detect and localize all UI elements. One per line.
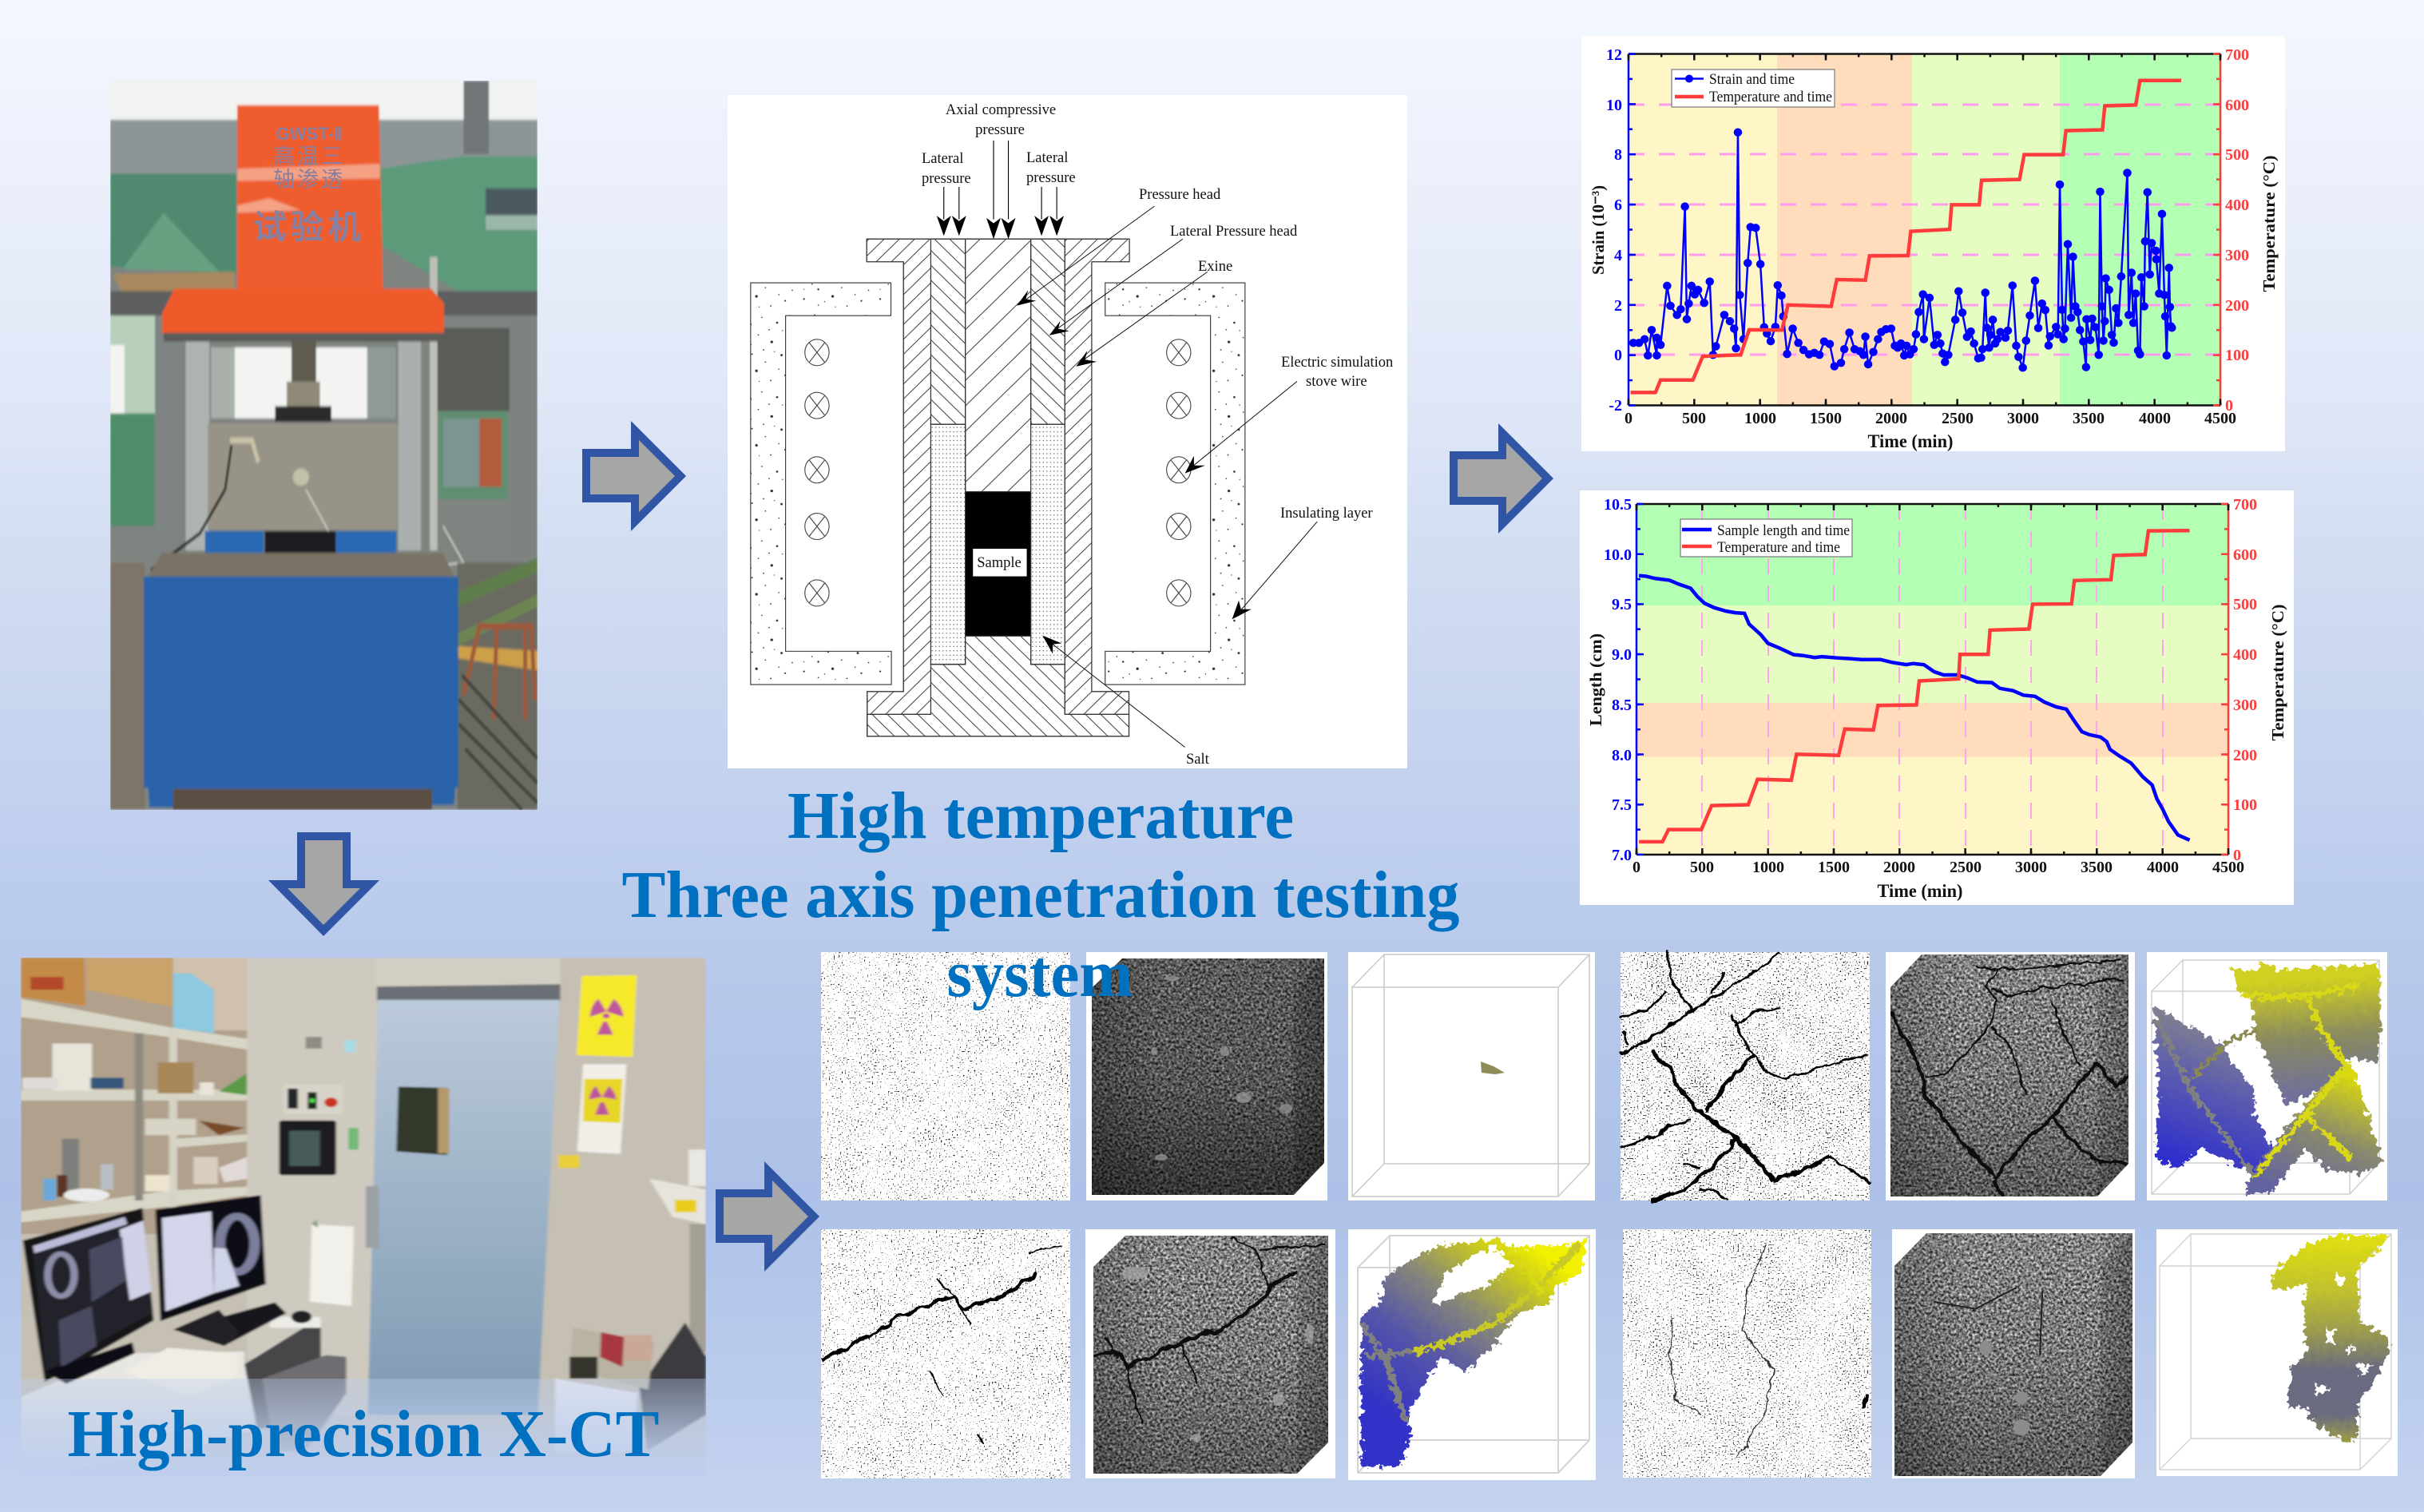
series: sample length <box>1639 576 2190 840</box>
x tick labels: 500 <box>1690 859 1714 876</box>
title: high temperature system <box>621 779 1460 1011</box>
left tick labels: 9.0 <box>1612 646 1632 664</box>
x tick labels <box>1633 859 2244 876</box>
x tick labels: 1000 <box>1752 859 1784 876</box>
x tick labels: 3500 <box>2073 410 2105 427</box>
axis titles: Strain (10⁻³) <box>1589 185 1608 275</box>
chart background <box>1581 36 2285 451</box>
schematic background <box>728 95 1407 768</box>
chart: strain and temperature vs time <box>1581 36 2285 451</box>
sign text: 高温三 <box>273 145 345 169</box>
right tick labels <box>2225 46 2249 415</box>
left tick labels: 7.5 <box>1612 796 1632 814</box>
3D fracture network D <box>2156 1229 2398 1476</box>
axis titles: Length (cm) <box>1586 633 1605 726</box>
title: high temperature system: High temperature <box>788 779 1294 853</box>
left tick labels: -2 <box>1609 397 1622 415</box>
schematic labels: Exine <box>1198 259 1232 275</box>
left tick labels: 2 <box>1614 297 1622 315</box>
left tick labels: 10.5 <box>1604 496 1632 514</box>
right tick labels: 0 <box>2233 847 2241 864</box>
arrow: machine to schematic <box>582 421 686 531</box>
title: high-precision X-CT: High-precision X-CT <box>67 1397 660 1471</box>
left tick labels: 9.5 <box>1612 596 1632 613</box>
schematic drawing <box>751 141 1317 747</box>
CT cube D <box>1892 1229 2135 1478</box>
x tick labels: 2500 <box>1942 410 1974 427</box>
axis titles: Time (min) <box>1877 881 1963 901</box>
chart: sample length and temperature vs time <box>1580 490 2294 905</box>
left tick labels: 12 <box>1606 46 1622 64</box>
reference dashes <box>1702 504 2163 855</box>
CT cube B <box>1886 952 2135 1200</box>
schematic labels: pressure <box>975 122 1025 138</box>
right tick labels: 400 <box>2225 196 2249 214</box>
x tick labels: 3000 <box>2015 859 2047 876</box>
schematic labels: pressure <box>922 171 971 187</box>
axes and ticks <box>1628 53 2222 407</box>
left tick labels: 4 <box>1614 247 1622 264</box>
axis titles <box>1589 155 2279 451</box>
schematic labels: Electric simulation <box>1281 355 1393 371</box>
x tick labels: 2500 <box>1950 859 1982 876</box>
right tick labels: 500 <box>2233 596 2257 613</box>
right tick labels: 0 <box>2225 397 2233 415</box>
x tick labels: 3000 <box>2007 410 2039 427</box>
x tick labels: 4000 <box>2139 410 2171 427</box>
series: strain <box>1633 133 2172 367</box>
axis titles: Temperature (°C) <box>2268 604 2287 741</box>
legend: Temperature and time <box>1709 89 1832 105</box>
left tick labels: 6 <box>1614 196 1622 214</box>
schematic labels: Salt <box>1186 752 1210 768</box>
3D fracture network A <box>1348 952 1595 1200</box>
x tick labels: 1500 <box>1818 859 1850 876</box>
arrow: X-CT to CT images <box>716 1161 819 1272</box>
title: high temperature system: Three axis penetration testing <box>621 858 1460 932</box>
sign text: 轴渗透 <box>273 168 345 192</box>
x tick labels: 1000 <box>1744 410 1776 427</box>
right tick labels: 400 <box>2233 646 2257 664</box>
left tick labels: 8.5 <box>1612 696 1632 714</box>
schematic labels <box>922 102 1393 768</box>
x tick labels: 4000 <box>2147 859 2179 876</box>
x tick labels: 0 <box>1633 859 1640 876</box>
x tick labels: 4500 <box>2204 410 2236 427</box>
legend <box>1680 519 1852 557</box>
schematic labels: Sample <box>977 555 1022 571</box>
sign text <box>252 124 366 246</box>
phase bands <box>1629 54 2220 406</box>
x tick labels: 1500 <box>1810 410 1842 427</box>
axes and ticks <box>1636 503 2230 855</box>
panel: CT images, top row <box>821 952 2387 1200</box>
legend: Strain and time <box>1709 71 1795 88</box>
x tick labels: 4500 <box>2212 859 2244 876</box>
photo scene <box>110 81 538 810</box>
axis titles: Temperature (°C) <box>2259 155 2279 292</box>
arrow: machine down to X-CT <box>268 832 379 936</box>
x tick labels <box>1625 410 2236 427</box>
x tick labels: 0 <box>1625 410 1633 427</box>
left tick labels <box>1606 46 1622 415</box>
phase bands <box>1636 504 2228 855</box>
axis titles: Time (min) <box>1867 431 1954 451</box>
panel: CT images, bottom row <box>821 1229 2398 1480</box>
legend: Temperature and time <box>1717 539 1840 556</box>
left tick labels: 0 <box>1614 347 1622 364</box>
legend <box>1672 69 1835 107</box>
CT cube C <box>1085 1229 1335 1478</box>
reference dashes <box>1629 105 2220 355</box>
CT slice B <box>1621 952 1870 1200</box>
left tick labels: 8.0 <box>1612 747 1632 764</box>
right tick labels: 200 <box>2233 747 2257 764</box>
series: temperature <box>1639 530 2190 842</box>
right tick labels: 600 <box>2233 546 2257 564</box>
CT slice D <box>1623 1229 1871 1478</box>
right tick labels: 700 <box>2233 496 2257 514</box>
right tick labels <box>2233 496 2257 864</box>
legend: Sample length and time <box>1717 522 1850 539</box>
right tick labels: 300 <box>2233 696 2257 714</box>
schematic labels: Insulating layer <box>1280 506 1373 522</box>
left tick labels <box>1604 496 1632 864</box>
right tick labels: 300 <box>2225 247 2249 264</box>
CT cube A <box>1086 952 1327 1200</box>
x tick labels: 3500 <box>2081 859 2113 876</box>
schematic labels: Pressure head <box>1139 187 1221 203</box>
sign text: 试验机 <box>252 208 366 246</box>
chart background <box>1580 490 2294 905</box>
right tick labels: 100 <box>2225 347 2249 364</box>
schematic labels: Lateral <box>922 151 963 167</box>
CT slice A <box>821 952 1070 1200</box>
sign text: GWST-Ⅱ <box>276 124 342 144</box>
left tick labels: 10.0 <box>1604 546 1632 564</box>
right tick labels: 100 <box>2233 796 2257 814</box>
x tick labels: 2000 <box>1883 859 1915 876</box>
x tick labels: 500 <box>1682 410 1706 427</box>
panel: schematic of triaxial cell <box>728 95 1407 768</box>
panel: photo of X-CT room <box>21 958 706 1454</box>
left tick labels: 8 <box>1614 146 1622 164</box>
3D fracture network B <box>2147 952 2387 1200</box>
arrow: schematic to charts <box>1450 423 1553 534</box>
3D fracture network C <box>1348 1229 1596 1480</box>
right tick labels: 200 <box>2225 297 2249 315</box>
left tick labels: 10 <box>1606 97 1622 114</box>
right tick labels: 700 <box>2225 46 2249 64</box>
series: temperature <box>1631 81 2181 392</box>
axis titles <box>1586 604 2287 901</box>
left tick labels: 7.0 <box>1612 847 1632 864</box>
schematic labels: stove wire <box>1306 374 1367 390</box>
schematic labels: Axial compressive <box>946 102 1056 118</box>
schematic labels: Lateral Pressure head <box>1170 224 1298 240</box>
right tick labels: 500 <box>2225 146 2249 164</box>
panel: photo of GWST-II test machine <box>110 81 538 810</box>
schematic labels: Lateral <box>1026 150 1068 166</box>
right tick labels: 600 <box>2225 97 2249 114</box>
CT slice C <box>821 1229 1070 1478</box>
title: high temperature system: system <box>947 937 1133 1011</box>
x tick labels: 2000 <box>1875 410 1907 427</box>
schematic labels: pressure <box>1026 170 1076 186</box>
